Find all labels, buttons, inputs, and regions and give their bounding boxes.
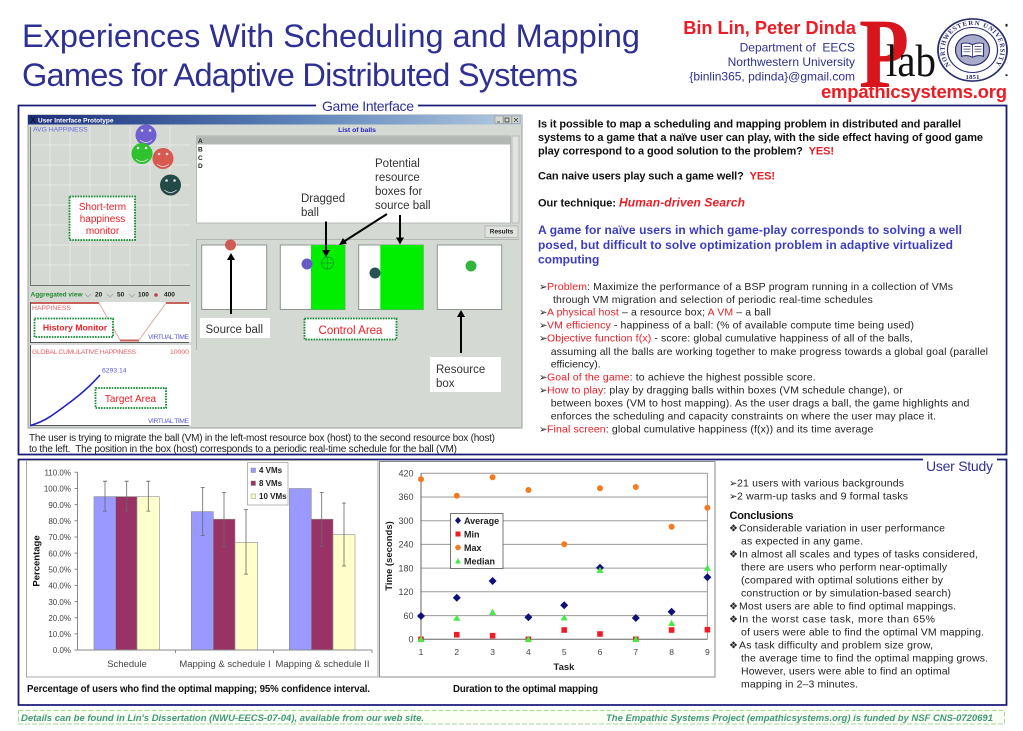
cumulative happiness plot: VIRTUAL TIME [148,418,189,425]
intro questions: Is it possible to map a scheduling and mapping problem in distributed and parallel [538,119,961,131]
list of balls: D [198,163,203,170]
aggregated view radio buttons: 50 [117,292,125,298]
intro questions: Can naive users play such a game well? YES! [538,171,775,183]
game definition bullet list [539,281,988,436]
series: max [418,474,710,547]
authors and affiliation: {binlin365, pdinda}@gmail.com [689,70,855,84]
callout: target area [96,388,166,408]
screenshot caption: to the left. The position in the box (host) corresponds to a periodic real-time schedule for the ball (VM) [29,444,457,455]
scatter chart caption: Duration to the optimal mapping [453,684,598,695]
game definition bullet list: Objective function f(x) - score: global cumulative happiness of all of the balls, [547,333,913,345]
panel: game interface [18,98,1006,455]
short-term happiness plot [30,124,190,286]
grid and axes: 240 [398,540,414,550]
title: Experiences With Scheduling and Mapping [22,18,640,54]
user study text: construction or by simulation-based search) [741,588,951,600]
game definition bullet list: through VM migration and selection of periodic real-time schedules [553,294,873,306]
legend [450,514,503,568]
y axis: 110.0% [44,468,71,478]
grid and axes [384,468,710,673]
y axis: 50.0% [48,566,71,574]
user study text: In almost all scales and types of tasks considered, [739,549,978,561]
y axis: 30.0% [48,598,71,607]
series: median [418,564,711,642]
user study text: ❖ [729,641,738,652]
window title bar: X [30,115,36,125]
annotation: resource box: Resource [436,364,485,376]
panel heading: User Study: User Study [926,458,993,474]
grid and axes: 8 [669,647,674,657]
authors and affiliation: Northwestern University [728,55,855,69]
aggregated view radio buttons: 400 [164,292,175,298]
legend: Min [464,530,480,540]
control area: resource boxes [196,240,519,350]
callout: short-term happiness monitor: Short-term [79,202,126,213]
annotation: potential resource boxes: source ball [375,200,431,212]
user study text: However, users were able to find an optimal [741,666,950,678]
logo: Northwestern University seal [937,18,1008,82]
y axis [32,468,78,655]
intro questions [538,119,983,210]
user study text [729,478,988,691]
user study text: as expected in any game. [741,535,863,547]
authors and affiliation [683,18,857,84]
grid and axes: 2 [454,647,459,657]
annotation: source ball [200,253,270,338]
y axis: 100.0% [44,485,71,494]
game definition bullet list: ➢ [539,425,547,436]
user study text: ❖ [729,550,738,561]
game definition bullet list: VM efficiency - happiness of a ball: (% of available compute time being used) [547,320,914,332]
window title bar [28,115,522,125]
user study text: ❖ [729,524,738,535]
x axis: Mapping & schedule II [275,659,370,670]
aggregated view radio buttons: 20 [95,292,103,298]
game definition bullet list: ➢ [539,308,547,319]
bars: mapping and schedule II [289,488,355,650]
bar chart caption: Percentage of users who find the optimal mapping; 95% confidence interval. [27,684,370,695]
game definition bullet list: efficiency). [551,359,601,371]
grid and axes: 360 [398,492,414,502]
bars: schedule [94,497,159,650]
user study text: 2 warm-up tasks and 9 formal tasks [737,491,908,503]
results button [485,226,518,238]
y axis: 10.0% [48,630,71,639]
footer note: funding: The Empathic Systems Project (empathicsystems.org) is funded by NSF CNS-0720691 [606,713,993,724]
logo: Plab: P [859,0,909,109]
grid and axes: 7 [633,647,638,657]
annotation: potential resource boxes: Potential [375,158,420,170]
game definition bullet list: enforces the scheduling and capacity constraints on where the user may place it. [551,411,936,423]
intro questions: systems to a game that a naïve user can play, with the side effect having of good game [538,132,983,144]
x axis [78,650,372,670]
website link: empathicsystems.org [821,81,1007,102]
blue summary statement: computing [538,253,599,267]
grid and axes: 9 [705,647,710,657]
callout: control area: Control Area [319,325,383,337]
grid and axes: Time (seconds) [384,521,395,591]
user study text: Conclusions [730,510,794,522]
intro questions: Human-driven Search [619,196,745,210]
game definition bullet list: A physical host – a resource box; A VM – a ball [547,307,771,319]
grid and axes: 6 [598,647,603,657]
annotation: dragged ball [301,193,345,257]
callout: history monitor [34,318,113,337]
list of balls: A [198,138,203,145]
y axis: 80.0% [48,517,71,526]
list of balls [196,127,519,223]
aggregated view radio buttons: 100 [138,292,149,298]
cumulative happiness plot: 6293.14 [102,368,127,374]
series: average [417,564,711,622]
annotation: potential resource boxes [339,158,431,245]
user study text: ❖ [729,615,738,626]
user study text: (compared with optimal solutions either by [741,575,944,587]
screenshot caption [29,433,495,455]
annotation: dragged ball: Dragged [301,193,345,205]
footer note: dissertation: Details can be found in Lin's Dissertation (NWU-EECS-07-04), available from our web site. [21,713,424,724]
panel heading: Game Interface: Game Interface [322,98,414,114]
annotation: resource box [430,310,501,392]
blue summary statement: A game for naïve users in which game-play corresponds to solving a well [538,223,962,237]
aggregated view radio buttons [30,292,175,298]
results button: Results [490,228,514,236]
y axis: Percentage [32,535,42,587]
authors and affiliation: Department of EECS [740,40,855,54]
history plot: HAPPINESS [32,305,71,312]
grid and axes: Task [554,662,575,673]
blue summary statement [538,223,962,267]
title [22,18,640,93]
series: min [418,627,710,642]
user study text: ➢ [729,492,737,503]
y axis: 20.0% [48,614,71,623]
game definition bullet list: between boxes (VM to host mapping). As the user drags a ball, the game highlights and [551,398,969,410]
smiley balls [132,124,181,196]
cumulative happiness plot: 10000 [170,349,189,356]
authors and affiliation: Bin Lin, Peter Dinda [683,18,857,38]
y axis: 40.0% [48,582,71,591]
user study text: Most users are able to find optimal mappings. [739,601,956,613]
list of balls: List of balls [338,127,376,134]
intro questions: Our technique: [538,198,616,210]
x axis: Schedule [107,659,147,670]
cumulative happiness plot: GLOBAL CUMULATIVE HAPPINESS [32,349,136,356]
title: Games for Adaptive Distributed Systems [22,57,578,93]
panel: user study [18,458,1006,705]
legend: 8 VMs [259,479,283,488]
user study text: ➢ [729,479,737,490]
window title bar: User Interface Prototype [38,118,114,124]
scatter chart: duration to optimal mapping [380,462,715,677]
intro questions: play correspond to a good solution to the problem? YES! [538,145,834,157]
grid and axes: 0 [408,634,414,644]
list of balls: B [198,146,203,154]
grid and axes: 1 [419,647,424,657]
game definition bullet list: Goal of the game: to achieve the highest possible score. [547,372,816,384]
grid and axes: 4 [526,647,531,657]
logo: Northwestern University seal: 1851 [966,75,979,81]
short-term happiness plot: AVG HAPPINESS [33,126,88,134]
blue summary statement: posed, but difficult to solve optimization problem in adaptive virtualized [538,238,953,252]
y axis: 70.0% [48,533,71,542]
grid and axes: 60 [403,611,414,621]
user study text: 21 users with various backgrounds [737,478,904,490]
user study text: Considerable variation in user performance [739,523,945,535]
annotation: source ball: Source ball [206,324,263,336]
callout: history monitor: History Monitor [43,322,108,332]
user study text: In the worst case task, more than 65% [739,614,935,626]
legend: Median [464,556,495,566]
legend: 4 VMs [259,466,283,475]
legend [248,462,288,505]
bars: mapping and schedule I [191,512,257,650]
annotation: potential resource boxes: boxes for [375,186,422,198]
game definition bullet list: How to play: play by dragging balls within boxes (VM schedule change), or [547,385,903,397]
callout: short-term happiness monitor: happiness [80,214,125,225]
annotation: dragged ball: ball [301,207,319,219]
callout: short-term happiness monitor: monitor [86,226,120,237]
resource box 3 [359,245,423,310]
resource box 1 with source ball [202,240,267,310]
footer band [18,710,1004,724]
game definition bullet list: ➢ [539,373,547,384]
resource box 4 [437,245,502,310]
list of balls: C [198,155,203,162]
user study text: ❖ [729,602,738,613]
history plot [30,302,191,342]
legend: Average [464,516,499,526]
user study text: the average time to find the optimal mapping grows. [741,653,988,665]
legend: 10 VMs [259,492,287,501]
grid and axes: 300 [398,516,414,526]
game definition bullet list: Final screen: global cumulative happiness (f(x)) and its time average [547,424,873,436]
y axis: 60.0% [48,549,71,558]
error bars [103,481,346,574]
user study text: of users were able to find the optimal VM mapping. [741,627,984,639]
user study text: mapping in 2–3 minutes. [741,679,858,691]
grid and axes: 120 [398,587,414,597]
annotation: resource box: box [436,378,455,390]
callout: target area: Target Area [105,394,157,405]
grid and axes: 3 [490,647,495,657]
game definition bullet list: Problem: Maximize the performance of a BSP program running in a collection of VMs [547,281,953,293]
legend: Max [464,543,482,553]
x axis: Mapping & schedule I [179,659,271,670]
resource box 2 with dragged ball [280,245,345,310]
game definition bullet list: ➢ [539,282,547,293]
game definition bullet list: ➢ [539,334,547,345]
y axis: 90.0% [48,501,71,510]
user study text: As task difficulty and problem size grow, [739,640,933,652]
bar chart: percentage of users finding optimal mapping [26,460,378,677]
callout: short-term happiness monitor [70,196,135,240]
history plot: VIRTUAL TIME [148,334,189,341]
aggregated view radio buttons: Aggregated view [30,292,83,298]
grid and axes: 5 [562,647,567,657]
game definition bullet list: ➢ [539,386,547,397]
y axis: 0.0% [53,646,71,655]
grid and axes: 420 [398,468,414,478]
callout: control area [304,318,396,340]
game screenshot window [28,115,522,428]
annotation: potential resource boxes: resource [375,172,420,184]
game definition bullet list: assuming all the balls are working together to make progress towards a global goal (parallel [551,346,988,358]
user study text: there are users who perform near-optimally [741,562,948,574]
logo: Northwestern University seal: NORTHWESTERN UNIVERSITY [940,20,1005,68]
cumulative happiness plot [30,345,191,426]
grid and axes: 180 [398,563,414,573]
screenshot caption: The user is trying to migrate the ball (VM) in the left-most resource box (host) to the second resource box (host) [29,433,495,444]
logo: Plab: lab [886,35,936,86]
game definition bullet list: ➢ [539,321,547,332]
